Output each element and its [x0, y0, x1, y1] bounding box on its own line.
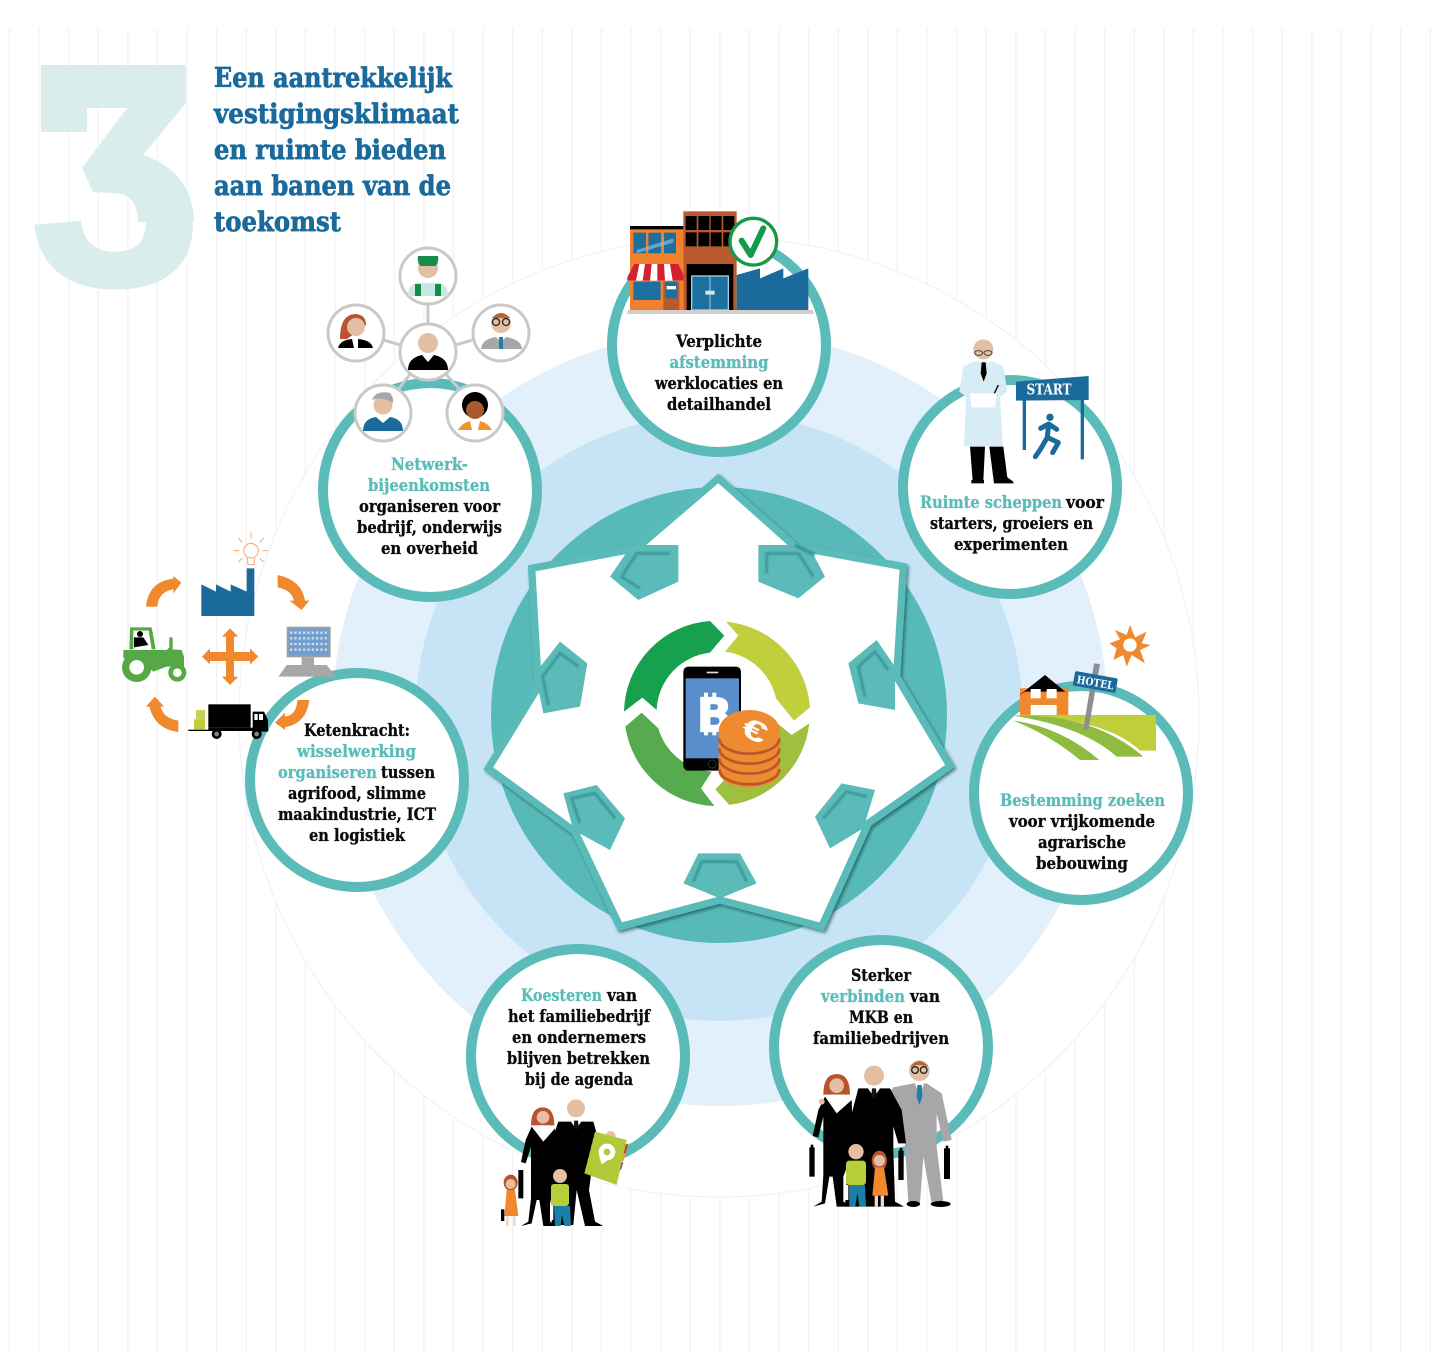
text: verplichte afstemming: werklocaties en: [654, 374, 783, 393]
panel: ketenkracht: [122, 533, 464, 887]
panel: verplichte afstemming: [612, 211, 826, 452]
text: netwerkbijeenkomsten: [357, 455, 502, 558]
icon: doctor and start sign: START: [1026, 381, 1072, 399]
text: ruimte scheppen: Ruimte scheppen: [920, 493, 1062, 512]
text: ketenkracht: en logistiek: [309, 826, 405, 845]
text: sterker verbinden: [813, 966, 949, 1048]
icon: smartphone: [683, 667, 741, 771]
icon: euro coins: €: [737, 711, 773, 750]
big number 3: [34, 65, 194, 290]
text: koesteren familiebedrijf: [507, 986, 651, 1089]
text: netwerkbijeenkomsten: organiseren voor: [359, 497, 500, 516]
icon: family with agenda: [501, 1099, 628, 1226]
text: koesteren familiebedrijf: van: [606, 986, 637, 1005]
central recycling icon with phone and coins: [624, 621, 810, 806]
text: bestemming zoeken: Bestemming zoeken: [1000, 791, 1165, 810]
text: ketenkracht: [278, 721, 437, 845]
avatar: woman: [328, 305, 384, 361]
avatar: grey hair man: [355, 385, 411, 441]
icon: computer: [278, 627, 336, 677]
text: ketenkracht: agrifood, slimme: [288, 784, 426, 803]
panel: koesteren familiebedrijf: [471, 949, 685, 1226]
text: koesteren familiebedrijf: Koesteren: [521, 986, 602, 1005]
panel: ruimte scheppen: [903, 339, 1117, 594]
central star: [488, 478, 950, 927]
avatar: green cap: [400, 248, 456, 304]
text: netwerkbijeenkomsten: en overheid: [381, 539, 478, 558]
text: ruimte scheppen: experimenten: [954, 535, 1068, 554]
text: verplichte afstemming: detailhandel: [667, 395, 771, 414]
text: netwerkbijeenkomsten: bedrijf, onderwijs: [357, 518, 502, 537]
avatar: centre: [400, 324, 456, 380]
icon: delivery truck: [188, 704, 268, 739]
text: koesteren familiebedrijf: en ondernemers: [512, 1028, 646, 1047]
icon: tractor: [122, 627, 186, 682]
text: ketenkracht: tussen: [381, 763, 435, 782]
text: verplichte afstemming: [654, 332, 783, 414]
icon: doctor and start sign: [959, 339, 1089, 483]
text: verplichte afstemming: afstemming: [670, 353, 769, 372]
icon: factory with light bulb: [201, 533, 268, 616]
text: bestemming zoeken: agrarische: [1038, 833, 1126, 852]
text: bestemming zoeken: [1000, 791, 1165, 873]
text: bestemming zoeken: bebouwing: [1036, 854, 1128, 873]
title: toekomst: [214, 207, 341, 238]
text: ruimte scheppen: starters, groeiers en: [930, 514, 1093, 533]
big number 3: 3: [29, 4, 203, 352]
text: koesteren familiebedrijf: bij de agenda: [525, 1070, 633, 1089]
icon: euro coins: [719, 710, 780, 787]
text: netwerkbijeenkomsten: bijeenkomsten: [368, 476, 490, 495]
arrow ring: [624, 621, 810, 806]
avatar: dark hair woman: [447, 385, 503, 441]
title: [213, 63, 459, 238]
text: netwerkbijeenkomsten: Netwerk-: [391, 455, 468, 474]
text: ketenkracht: Ketenkracht:: [304, 721, 410, 740]
icon: farm, hotel sign and sun: HOTEL: [1076, 673, 1115, 693]
text: bestemming zoeken: voor vrijkomende: [1008, 812, 1155, 831]
text: ketenkracht: wisselwerking: [296, 742, 416, 761]
text: koesteren familiebedrijf: het familiebedrijf: [508, 1007, 651, 1026]
text: sterker verbinden: MKB en: [849, 1008, 913, 1027]
icon: people network: [328, 248, 529, 441]
title: aan banen van de: [214, 171, 451, 202]
title: Een aantrekkelijk: [214, 63, 453, 94]
text: ketenkracht: organiseren: [278, 763, 377, 782]
text: verplichte afstemming: Verplichte: [675, 332, 762, 351]
icon: farm, hotel sign and sun: [1013, 625, 1156, 760]
text: sterker verbinden: familiebedrijven: [813, 1029, 949, 1048]
text: sterker verbinden: van: [909, 987, 940, 1006]
text: sterker verbinden: verbinden: [820, 987, 905, 1006]
icon: buildings with check mark: [627, 211, 813, 314]
panel: sterker verbinden: [774, 940, 988, 1207]
text: sterker verbinden: Sterker: [851, 966, 911, 985]
text: koesteren familiebedrijf: blijven betrekken: [507, 1049, 650, 1068]
text: ruimte scheppen: voor: [1065, 493, 1104, 512]
text: ruimte scheppen: [920, 493, 1104, 554]
title: vestigingsklimaat: [213, 99, 459, 130]
panel: netwerkbijeenkomsten: [323, 248, 537, 597]
concentric background circles: [239, 237, 1199, 1197]
icon: smartphone: B: [697, 690, 732, 744]
text: ketenkracht: maakindustrie, ICT: [278, 805, 437, 824]
title: en ruimte bieden: [214, 135, 446, 166]
arrows: orange cycle: [146, 575, 309, 732]
panel: bestemming zoeken: [974, 625, 1188, 900]
icon: value chain: [122, 533, 336, 739]
avatar: glasses man: [473, 305, 529, 361]
icon: family of five: [809, 1060, 952, 1207]
